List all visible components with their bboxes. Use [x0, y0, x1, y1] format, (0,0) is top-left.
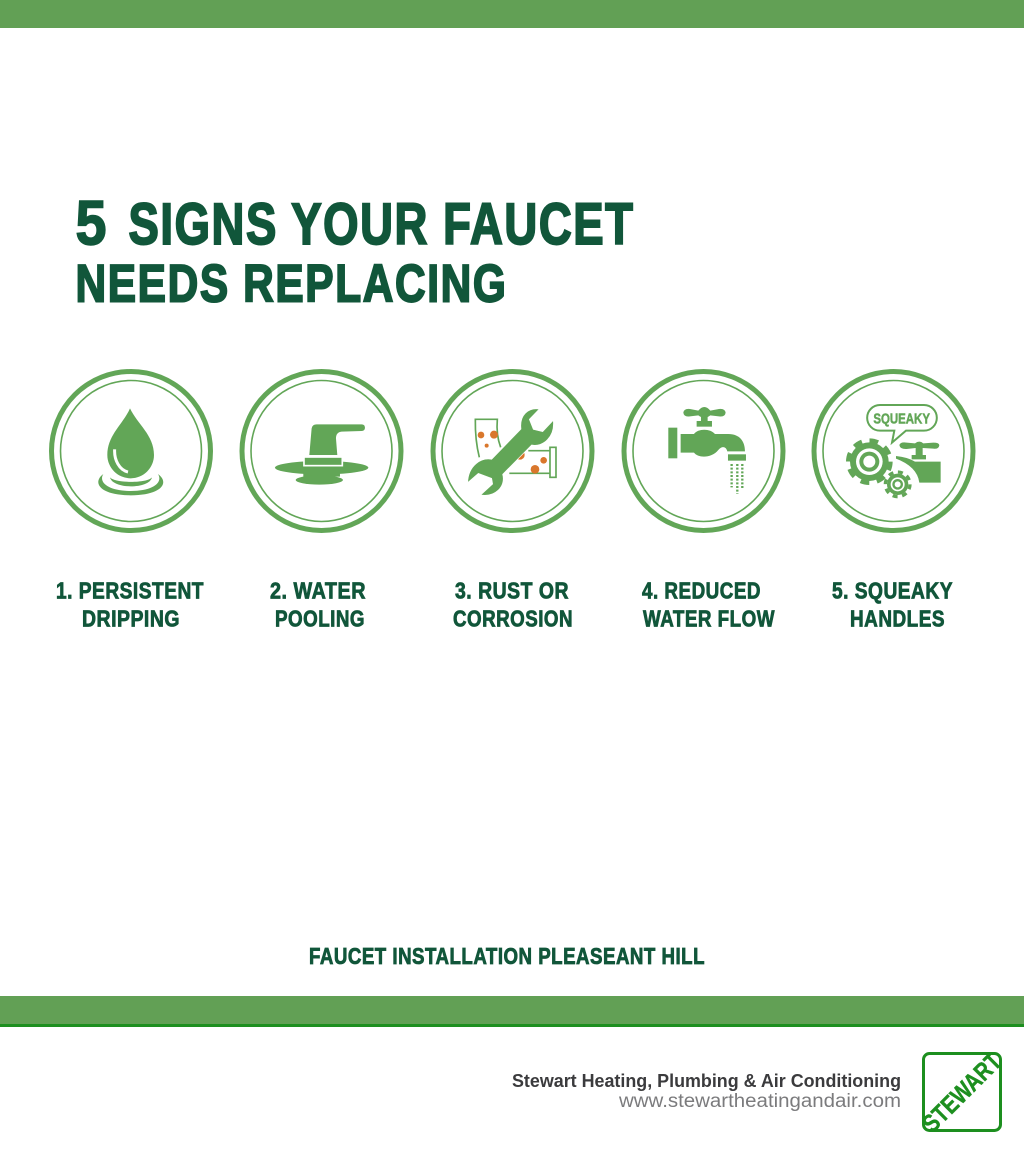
icon circle 2: water pooling — [242, 372, 401, 530]
icon circle 3: rust or corrosion — [433, 372, 592, 530]
logo — [922, 1052, 1002, 1132]
icon circle 5: squeaky handles — [814, 372, 973, 530]
label 5: HANDLES — [850, 606, 945, 632]
label 1 — [56, 578, 204, 632]
icon circle 1: persistent dripping — [52, 372, 210, 530]
title: SIGNS YOUR FAUCET — [128, 192, 634, 257]
title: 5 — [76, 188, 106, 258]
label 2 — [270, 578, 366, 632]
label 1: 1. PERSISTENT — [56, 578, 204, 604]
speech bubble: SQUEAKY — [873, 411, 930, 427]
title — [76, 188, 634, 314]
company name: Stewart Heating, Plumbing & Air Conditioning — [512, 1071, 901, 1091]
top bar — [0, 0, 1024, 28]
title: NEEDS REPLACING — [76, 254, 508, 314]
icon circle 4: reduced water flow — [624, 372, 783, 530]
label 5: 5. SQUEAKY — [832, 578, 953, 604]
website: www.stewartheatingandair.com — [618, 1091, 901, 1112]
label 3: CORROSION — [453, 606, 573, 632]
label 3 — [453, 578, 573, 632]
label 4 — [642, 578, 775, 632]
label 4: 4. REDUCED — [642, 578, 761, 604]
label 2: POOLING — [275, 606, 365, 632]
caption: FAUCET INSTALLATION PLEASEANT HILL — [309, 943, 705, 969]
label 4: WATER FLOW — [643, 606, 775, 632]
logo: STEWART — [917, 1047, 1007, 1138]
label 1: DRIPPING — [82, 606, 180, 632]
bottom bar — [0, 996, 1024, 1027]
label 5 — [832, 578, 953, 632]
label 2: 2. WATER — [270, 578, 366, 604]
label 3: 3. RUST OR — [455, 578, 569, 604]
